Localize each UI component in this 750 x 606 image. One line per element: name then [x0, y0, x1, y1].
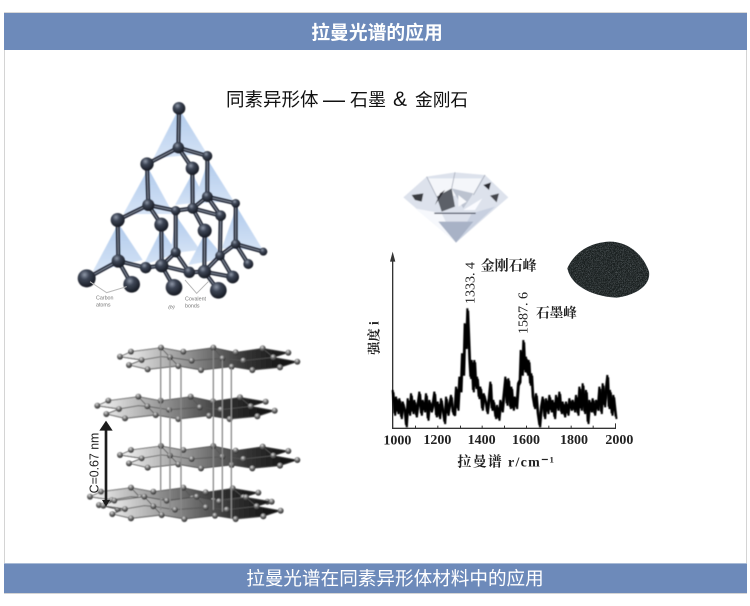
- peak value: 1333.4: 1333. 4: [463, 262, 478, 304]
- x-axis tick labels: 1000: [383, 434, 411, 449]
- x-axis tick labels: [383, 433, 633, 449]
- footer bar: [4, 563, 747, 593]
- x-axis tick labels: 1600: [512, 433, 540, 448]
- arrow: layer spacing: [99, 421, 113, 507]
- y-axis title: 强度 i: [365, 321, 381, 355]
- footer bar: 拉曼光谱在同素异形体材料中的应用: [246, 568, 544, 589]
- section title: [226, 87, 468, 112]
- spacing label: C=0.67 nm: [87, 433, 101, 493]
- leader lines and atom labels: atoms: [96, 303, 111, 309]
- covalent bonds: [87, 108, 263, 290]
- carbon atoms: [78, 102, 267, 299]
- axes: [390, 252, 616, 429]
- x-axis tick labels: 2000: [605, 433, 633, 448]
- diagram: graphite layered structure: [87, 345, 300, 522]
- icon: graphite powder pile: [567, 242, 649, 298]
- peak label: diamond: 金刚石峰: [481, 257, 537, 274]
- leader lines and atom labels: [90, 280, 208, 311]
- diagram: diamond crystal structure: [78, 102, 267, 311]
- leader lines and atom labels: (b): [168, 304, 175, 311]
- peak value: 1587.6: 1587. 6: [517, 292, 532, 334]
- header bar: [4, 12, 747, 50]
- graphene layers and interlayer lines: [87, 345, 300, 522]
- diagram: Raman spectrum with samples: [365, 172, 649, 471]
- section title: &: [393, 88, 407, 111]
- leader lines and atom labels: bonds: [185, 304, 200, 310]
- x-axis tick labels: 1200: [423, 433, 451, 448]
- section title: 金刚石: [415, 90, 468, 110]
- section title: —: [323, 87, 345, 112]
- peak label: graphite: 石墨峰: [536, 304, 577, 320]
- section title: 石墨: [350, 90, 386, 110]
- section title: 同素异形体: [226, 89, 319, 110]
- spectrum trace: [393, 308, 616, 427]
- x-axis title: 拉曼谱 r/cm⁻¹: [457, 454, 554, 471]
- leader lines and atom labels: Carbon: [96, 295, 114, 301]
- header bar: 拉曼光谱的应用: [311, 22, 443, 43]
- x-axis tick labels: 1800: [560, 433, 588, 448]
- blue tetrahedra shading: [93, 108, 263, 272]
- x-axis tick labels: 1400: [468, 433, 496, 448]
- leader lines and atom labels: Covalent: [185, 296, 207, 302]
- icon: diamond gem: [403, 172, 508, 243]
